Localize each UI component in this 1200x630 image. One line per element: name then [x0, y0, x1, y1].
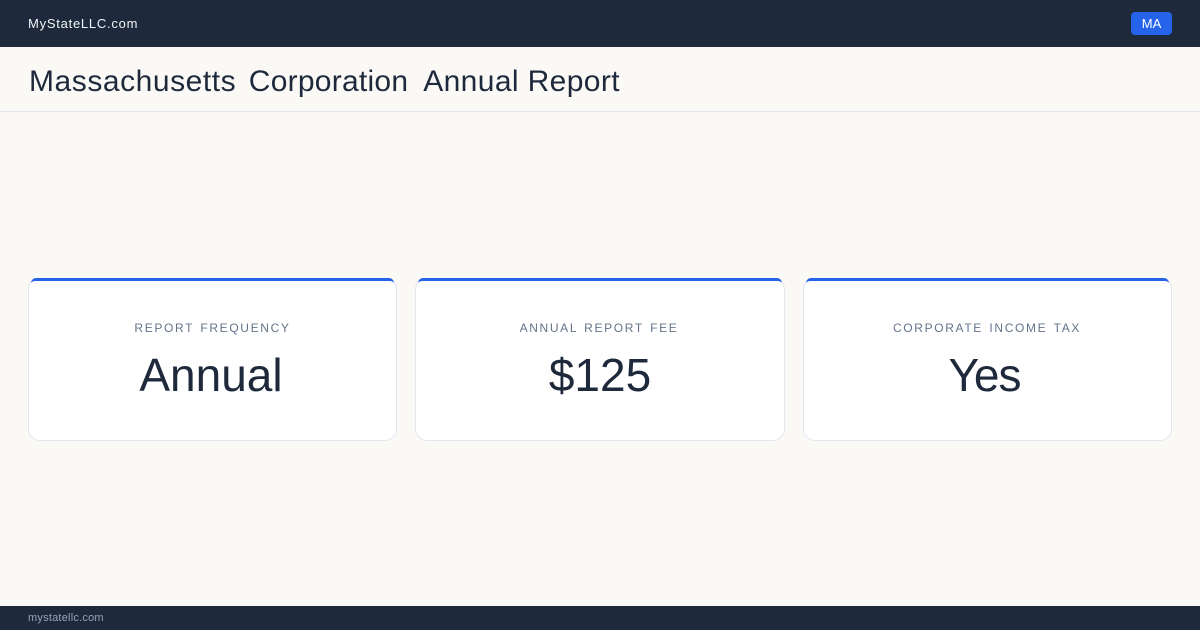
title band — [0, 47, 1200, 112]
label: annual report fee: ANNUAL REPORT FEE — [520, 321, 678, 335]
state badge — [1131, 12, 1172, 35]
top navigation bar — [0, 0, 1200, 47]
value: annual: Annual — [139, 349, 283, 401]
card: corporate income tax — [803, 278, 1172, 441]
value: yes: Yes — [948, 349, 1021, 401]
brand name: MyStateLLC.com — [28, 16, 138, 31]
card: annual report fee — [415, 278, 785, 441]
label: report frequency: REPORT FREQUENCY — [134, 321, 291, 335]
label: corporate income tax: CORPORATE INCOME TAX — [893, 321, 1081, 335]
value: fee amount: $125 — [549, 349, 651, 401]
footer bar — [0, 606, 1200, 630]
card: report frequency — [28, 278, 397, 441]
state badge: MA — [1142, 16, 1161, 31]
page title: Massachusetts Corporation Annual Report — [29, 65, 620, 98]
footer url: mystatellc.com — [28, 612, 104, 624]
